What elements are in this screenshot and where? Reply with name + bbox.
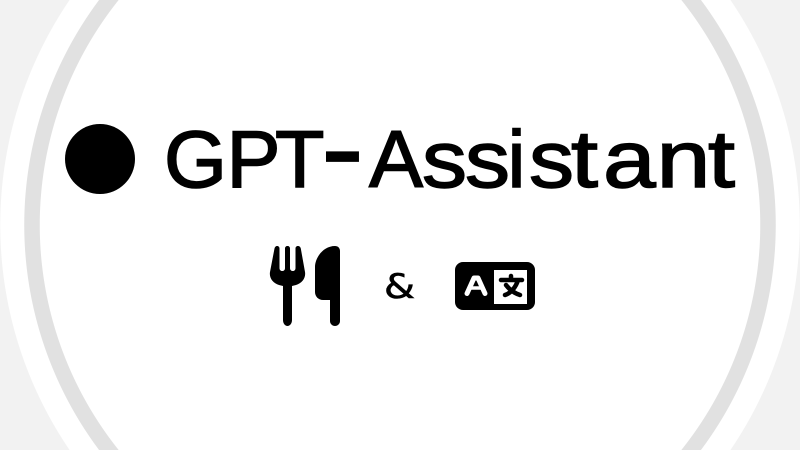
icon: fork and knife (270, 246, 340, 326)
icon: black status dot (65, 124, 135, 194)
title: i (508, 115, 526, 205)
title: t (708, 115, 735, 205)
icon: translate (455, 262, 535, 310)
letter A (467, 278, 485, 294)
title: s (529, 115, 574, 205)
title: A (369, 115, 423, 205)
title: s (422, 115, 467, 205)
title: - (320, 70, 365, 222)
title: a (603, 115, 657, 205)
ampersand: & (384, 267, 415, 307)
translated glyph (501, 276, 522, 295)
title: t (571, 115, 598, 205)
title: s (465, 115, 510, 205)
title: n (656, 115, 710, 205)
title: GPT (164, 115, 324, 205)
